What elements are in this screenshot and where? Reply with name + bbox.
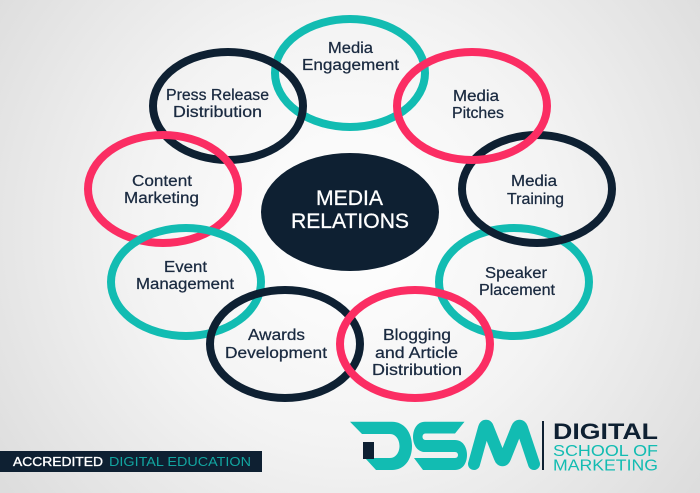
ring: Press Release Distribution: [153, 52, 303, 160]
ring: Press Release Distribution: Distribution: [173, 104, 262, 121]
banner: accredited digital education: DIGITAL EDUCATION: [109, 454, 251, 469]
ring: Media Training: Training: [507, 191, 564, 208]
ring: Press Release Distribution: Press Release: [166, 87, 269, 104]
logo text: Marketing: MARKETING: [553, 458, 658, 474]
ring: Media Pitches: Pitches: [452, 105, 504, 122]
ring: Media Pitches: Media: [453, 88, 499, 105]
logo divider: [542, 421, 544, 470]
ring: Media Engagement: Media: [328, 40, 373, 57]
logo text: Digital: DIGITAL: [553, 419, 658, 444]
logo letter M: [474, 426, 534, 464]
ring: Blogging and Article Distribution: Distribution: [372, 362, 462, 379]
ring: Content Marketing: Content: [132, 173, 193, 190]
ring: Content Marketing: [88, 135, 238, 243]
ring: Blogging and Article Distribution: Blogging: [383, 327, 451, 344]
ring: Awards Development: Awards: [248, 327, 305, 344]
logo letter D: [350, 422, 412, 470]
logo notch square: [363, 442, 374, 459]
ring: Awards Development: Development: [225, 345, 328, 362]
ring: Event Management: Management: [136, 276, 235, 293]
ring: Media Training: Media: [511, 173, 557, 190]
banner: accredited digital education: [0, 451, 262, 472]
ring: Media Pitches: [397, 52, 547, 160]
ring: Media Training: [462, 135, 612, 243]
ring: Speaker Placement: [439, 228, 589, 336]
ring: Media Engagement: Engagement: [302, 57, 400, 74]
ring: Media Engagement: [275, 19, 425, 127]
ring: Awards Development: [210, 290, 360, 398]
banner: accredited digital education: ACCREDITED: [13, 454, 103, 469]
ring: Blogging and Article Distribution: and Article: [375, 345, 458, 362]
logo: Digital School of Marketing: [350, 419, 658, 474]
ring: Speaker Placement: Speaker: [485, 265, 547, 282]
ring: Content Marketing: Marketing: [124, 190, 199, 207]
ring: Speaker Placement: Placement: [479, 282, 556, 299]
ring: Event Management: Event: [164, 259, 208, 276]
ring: Blogging and Article Distribution: [340, 290, 490, 398]
center ellipse: Media Relations: RELATIONS: [291, 210, 409, 233]
logo text: School of: SCHOOL OF: [553, 443, 658, 460]
logo letter S: [413, 422, 467, 470]
center ellipse: Media Relations: MEDIA: [316, 187, 383, 210]
center ellipse: Media Relations: [261, 153, 439, 271]
ring: Event Management: [111, 228, 261, 336]
